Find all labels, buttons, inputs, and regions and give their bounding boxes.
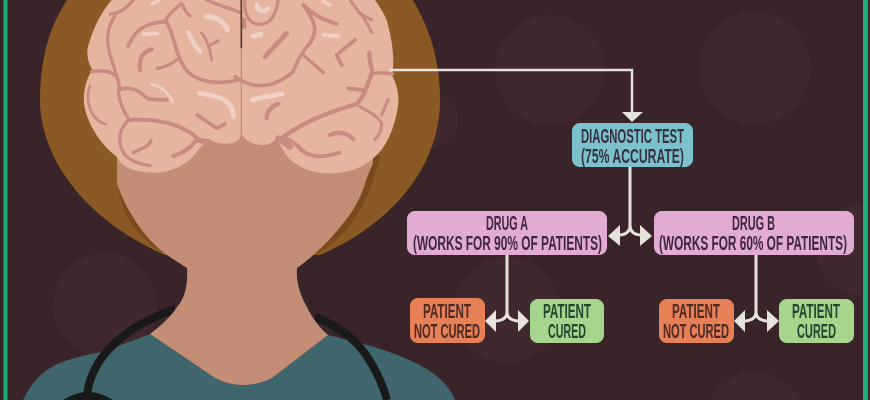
brain (84, 0, 398, 173)
brain folds (88, 0, 393, 166)
stethoscope (63, 309, 387, 400)
arrow: drug B outcomes (734, 255, 779, 332)
left hemisphere (84, 0, 241, 173)
box: diagnostic test: DIAGNOSTIC TEST (581, 126, 684, 148)
brain highlights (144, 1, 338, 117)
arrow: brain to diagnostic test (390, 70, 643, 122)
doctor illustration (23, 0, 455, 400)
box: drug B patient cured (779, 299, 854, 343)
box: drug A patient not cured (410, 298, 485, 343)
hair shadow (117, 150, 380, 262)
box: drug B patient not cured: NOT CURED (663, 321, 729, 343)
arrow: drug A outcomes (485, 255, 529, 332)
box: drug A patient cured (530, 299, 604, 343)
right hemisphere (241, 0, 398, 173)
box: drug B (654, 211, 854, 255)
arrow: test splits to drug A and drug B (608, 167, 652, 246)
box: drug B patient cured: CURED (797, 321, 836, 343)
box: drug A: (WORKS FOR 90% OF PATIENTS) (413, 233, 602, 255)
box: drug A patient not cured: PATIENT (423, 301, 471, 323)
box: drug A patient not cured: NOT CURED (414, 321, 480, 343)
box: drug A patient cured: PATIENT (543, 301, 591, 323)
hair (40, 0, 440, 255)
box: diagnostic test (572, 123, 693, 168)
shirt (23, 334, 455, 400)
box: drug B patient not cured (659, 299, 734, 343)
box: drug B patient not cured: PATIENT (672, 301, 720, 323)
box: diagnostic test: (75% ACCURATE) (581, 146, 684, 168)
box: drug A (407, 211, 607, 255)
box: drug A patient cured: CURED (548, 321, 586, 343)
box: drug A: DRUG A (486, 213, 528, 235)
midline (239, 0, 244, 133)
box: drug B: DRUG B (732, 213, 775, 235)
face and neck (117, 100, 373, 385)
